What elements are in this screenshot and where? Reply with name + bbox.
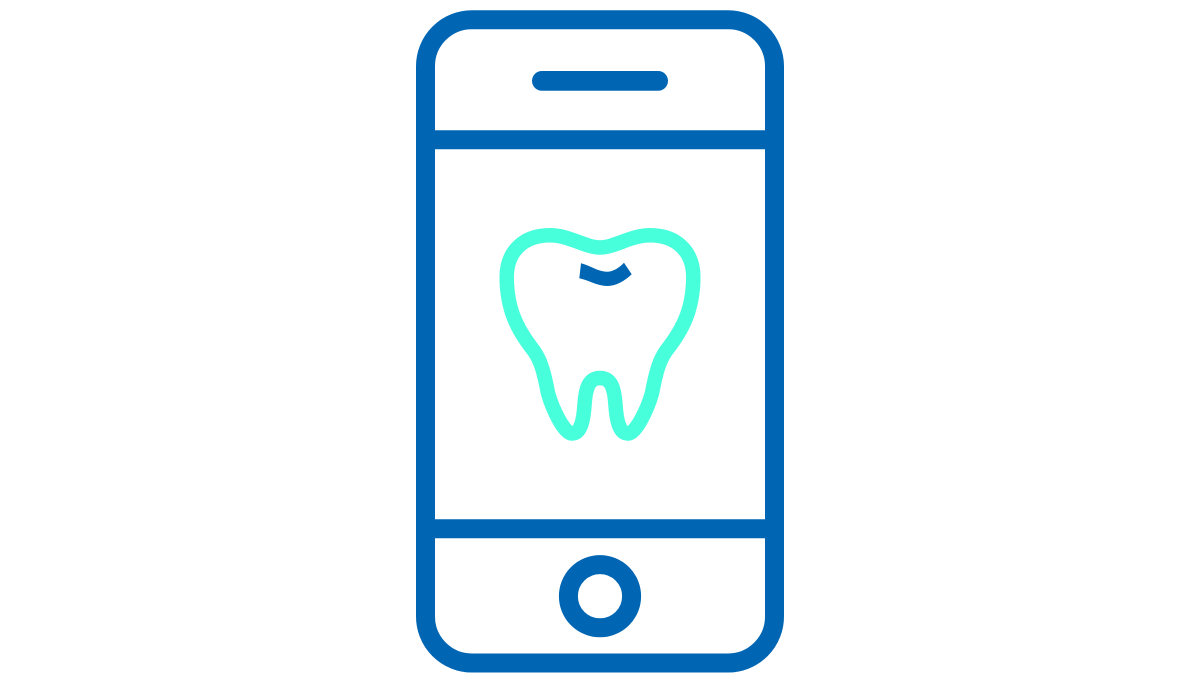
icon: home button	[568, 565, 632, 628]
icon: phone body	[426, 20, 774, 663]
icon: tooth cavity	[579, 263, 632, 286]
icon: phone speaker	[532, 71, 668, 91]
icon: tooth outline	[507, 235, 693, 434]
